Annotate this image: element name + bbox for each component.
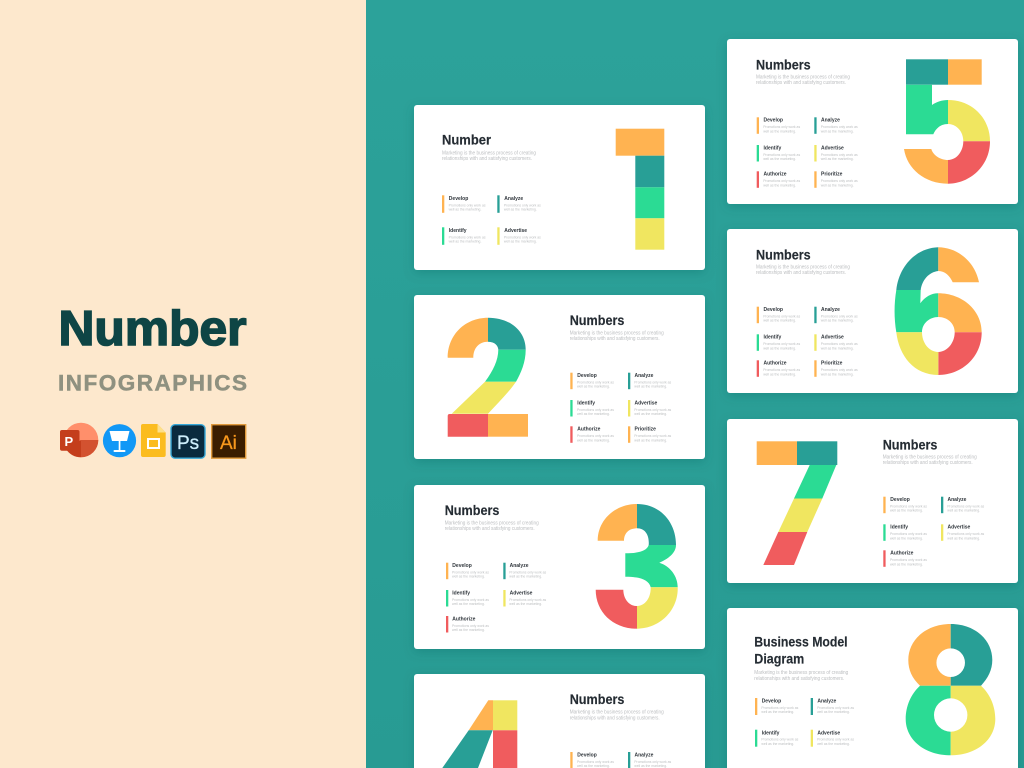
item: Advertise: Promotions only work as bbox=[821, 153, 858, 157]
panel: left cover bbox=[0, 0, 366, 768]
item: Develop: Develop bbox=[577, 373, 597, 379]
item: Analyze: well as the marketing. bbox=[509, 575, 542, 579]
panel: number 6 bbox=[727, 229, 1018, 393]
title: Numbers bbox=[883, 437, 937, 452]
item: Develop: Promotions only work as bbox=[577, 381, 614, 385]
item: Prioritize: well as the marketing. bbox=[821, 372, 854, 376]
icon: Photoshop bbox=[171, 425, 205, 458]
title bbox=[754, 635, 848, 666]
item: Advertise: Promotions only work as bbox=[634, 408, 672, 412]
panel: number 4 bbox=[414, 674, 705, 768]
panel: number 7 bbox=[727, 419, 1018, 583]
item: Prioritize: Prioritize bbox=[634, 427, 656, 433]
description bbox=[756, 74, 850, 86]
item: Authorize: Authorize bbox=[764, 361, 787, 367]
icon: PowerPoint: P bbox=[64, 434, 74, 449]
item: Analyze: Promotions only work as bbox=[634, 760, 672, 764]
item: Identify: Promotions only work as bbox=[763, 342, 800, 346]
item: Advertise: Promotions only work as bbox=[947, 532, 985, 536]
description: relationships with and satisfying customers. bbox=[883, 460, 973, 466]
item: Prioritize: Prioritize bbox=[821, 361, 843, 367]
item: Analyze: Analyze bbox=[821, 307, 840, 313]
item: Analyze: Analyze bbox=[821, 118, 840, 124]
item: Identify bbox=[446, 590, 489, 606]
item: Prioritize: well as the marketing. bbox=[634, 438, 667, 442]
item: Advertise: Promotions only work as bbox=[821, 342, 858, 346]
item: Advertise: Advertise bbox=[817, 730, 840, 736]
description: Marketing is the business process of creating bbox=[445, 520, 539, 526]
digit 6 bbox=[895, 247, 982, 375]
title: Numbers bbox=[445, 503, 499, 518]
item: Analyze bbox=[628, 752, 672, 768]
description: relationships with and satisfying customers. bbox=[756, 270, 846, 276]
item: Authorize: Authorize bbox=[577, 427, 601, 433]
digit 8 bbox=[906, 624, 995, 755]
item: Analyze: well as the marketing. bbox=[634, 764, 667, 768]
item: Develop: well as the marketing. bbox=[763, 129, 796, 133]
item: Develop: Promotions only work as bbox=[449, 204, 486, 208]
item: Develop: Develop bbox=[762, 699, 781, 705]
item: Identify: Promotions only work as bbox=[452, 598, 489, 602]
item: Identify: Promotions only work as bbox=[449, 236, 486, 240]
item: Develop bbox=[883, 497, 927, 513]
teal background bbox=[366, 0, 1024, 768]
item: Advertise: Promotions only work as bbox=[817, 738, 854, 742]
item: Identify: Identify bbox=[764, 145, 781, 151]
item: Prioritize: Promotions only work as bbox=[821, 368, 858, 372]
item: Identify: Identify bbox=[449, 228, 467, 234]
description: Marketing is the business process of creating bbox=[883, 454, 977, 460]
item: Authorize: well as the marketing. bbox=[763, 183, 796, 187]
item: Develop: well as the marketing. bbox=[577, 764, 610, 768]
item: Develop: Promotions only work as bbox=[452, 571, 489, 575]
item: Develop: Develop bbox=[890, 497, 910, 503]
item: Develop: Develop bbox=[449, 196, 468, 202]
description bbox=[442, 150, 536, 162]
item: Advertise: well as the marketing. bbox=[947, 536, 980, 540]
item: Develop: Promotions only work as bbox=[890, 505, 927, 509]
item: Develop: Develop bbox=[764, 307, 783, 313]
item: Analyze: well as the marketing. bbox=[821, 129, 854, 133]
item: Develop: well as the marketing. bbox=[763, 319, 796, 323]
item: Advertise: Advertise bbox=[821, 335, 844, 341]
item: Identify bbox=[442, 227, 486, 245]
item: Identify: well as the marketing. bbox=[761, 742, 794, 746]
panel: number 5 bbox=[727, 39, 1018, 204]
panel: number 3 bbox=[414, 485, 705, 649]
item: Authorize: Promotions only work as bbox=[890, 558, 927, 562]
item: Analyze: well as the marketing. bbox=[821, 319, 854, 323]
item: Develop: Develop bbox=[452, 563, 472, 569]
item: Identify bbox=[755, 730, 799, 747]
item: Authorize bbox=[446, 616, 489, 632]
digit 4 bbox=[442, 700, 517, 768]
item: Analyze bbox=[497, 195, 541, 213]
item: Identify: well as the marketing. bbox=[449, 240, 481, 244]
title: Diagram bbox=[754, 651, 804, 666]
description bbox=[445, 520, 539, 532]
item: Identify: Promotions only work as bbox=[761, 738, 799, 742]
digit 5 bbox=[904, 59, 990, 184]
item: Authorize: Authorize bbox=[452, 616, 476, 622]
item: Develop bbox=[757, 307, 800, 323]
item: Advertise: well as the marketing. bbox=[509, 602, 542, 606]
title: Numbers bbox=[570, 313, 624, 328]
item: Advertise: Advertise bbox=[948, 525, 971, 531]
item: Authorize: Authorize bbox=[764, 172, 787, 178]
item: Authorize: well as the marketing. bbox=[763, 372, 796, 376]
item: Prioritize bbox=[814, 171, 858, 188]
item: Identify: well as the marketing. bbox=[763, 157, 796, 161]
item: Authorize bbox=[757, 360, 800, 377]
item: Develop bbox=[442, 195, 486, 213]
item: Analyze: well as the marketing. bbox=[634, 385, 667, 389]
item: Analyze bbox=[814, 117, 858, 134]
description: relationships with and satisfying customers. bbox=[445, 526, 535, 532]
item: Advertise: Promotions only work as bbox=[504, 236, 541, 240]
item: Develop bbox=[570, 752, 614, 768]
item: Advertise: Advertise bbox=[634, 400, 658, 406]
item: Prioritize: Promotions only work as bbox=[634, 434, 672, 438]
item: Authorize: well as the marketing. bbox=[452, 628, 485, 632]
item: Develop bbox=[570, 373, 614, 389]
description: Marketing is the business process of creating bbox=[754, 670, 848, 676]
item: Authorize: Promotions only work as bbox=[763, 368, 800, 372]
item: Identify bbox=[883, 524, 927, 541]
description: relationships with and satisfying customers. bbox=[442, 156, 532, 162]
item: Develop: well as the marketing. bbox=[449, 208, 481, 212]
item: Analyze: Promotions only work as bbox=[509, 571, 547, 575]
item: Identify: well as the marketing. bbox=[452, 602, 485, 606]
heading: Number: Number bbox=[58, 301, 246, 356]
item: Analyze: Promotions only work as bbox=[634, 381, 672, 385]
item: Analyze bbox=[814, 307, 858, 323]
item: Prioritize bbox=[628, 426, 672, 443]
item: Identify: Promotions only work as bbox=[890, 532, 927, 536]
item: Develop: Promotions only work as bbox=[761, 706, 799, 710]
icon: Google Slides bbox=[141, 424, 166, 457]
item: Analyze: Promotions only work as bbox=[504, 204, 541, 208]
title: Business Model bbox=[754, 635, 848, 650]
item: Advertise bbox=[941, 524, 985, 541]
item: Identify: Identify bbox=[762, 730, 780, 736]
icon: Illustrator: Ai bbox=[220, 433, 237, 454]
item: Analyze bbox=[811, 698, 854, 715]
item: Prioritize: well as the marketing. bbox=[821, 183, 854, 187]
description: relationships with and satisfying customers. bbox=[754, 676, 844, 682]
item: Prioritize: Promotions only work as bbox=[821, 179, 858, 183]
item: Analyze: Promotions only work as bbox=[817, 706, 854, 710]
item: Analyze: well as the marketing. bbox=[947, 509, 980, 513]
item: Analyze: Analyze bbox=[510, 563, 529, 569]
item: Advertise: well as the marketing. bbox=[634, 412, 667, 416]
item: Advertise: Promotions only work as bbox=[509, 598, 547, 602]
item: Advertise: Advertise bbox=[504, 228, 527, 234]
item: Authorize bbox=[883, 550, 927, 567]
item: Identify: Promotions only work as bbox=[763, 153, 800, 157]
item: Analyze bbox=[503, 563, 547, 579]
description bbox=[754, 670, 848, 682]
item: Analyze: Analyze bbox=[504, 196, 523, 202]
item: Identify: Identify bbox=[452, 590, 470, 596]
item: Develop: Develop bbox=[764, 118, 783, 124]
item: Identify: well as the marketing. bbox=[890, 536, 923, 540]
item: Advertise: well as the marketing. bbox=[817, 742, 850, 746]
item: Develop: Develop bbox=[577, 752, 597, 758]
description: Marketing is the business process of creating bbox=[570, 330, 664, 336]
item: Analyze: well as the marketing. bbox=[817, 710, 850, 714]
item: Analyze: Analyze bbox=[948, 497, 967, 503]
item: Develop: well as the marketing. bbox=[577, 385, 610, 389]
item: Advertise: well as the marketing. bbox=[821, 346, 854, 350]
description: Marketing is the business process of creating bbox=[442, 150, 536, 156]
item: Identify: Identify bbox=[890, 525, 908, 531]
item: Analyze: Analyze bbox=[634, 752, 654, 758]
item: Analyze: Promotions only work as bbox=[821, 315, 858, 319]
item: Identify bbox=[757, 334, 800, 351]
digit 3 bbox=[596, 504, 678, 629]
item: Advertise bbox=[814, 334, 858, 351]
item: Prioritize bbox=[814, 360, 858, 377]
digit 1 bbox=[616, 129, 664, 250]
item: Authorize: well as the marketing. bbox=[890, 562, 923, 566]
icon: Keynote bbox=[103, 424, 136, 457]
panel: number 8 bbox=[727, 608, 1018, 768]
digit 2 bbox=[448, 318, 528, 437]
item: Authorize: well as the marketing. bbox=[577, 438, 610, 442]
item: Authorize bbox=[570, 426, 614, 443]
item: Identify: Identify bbox=[577, 400, 595, 406]
description bbox=[570, 710, 664, 721]
item: Analyze: Promotions only work as bbox=[821, 125, 858, 129]
item: Analyze: Analyze bbox=[634, 373, 654, 379]
item: Authorize: Promotions only work as bbox=[577, 434, 614, 438]
title: Number bbox=[442, 133, 492, 148]
item: Advertise: well as the marketing. bbox=[504, 240, 537, 244]
item: Advertise bbox=[497, 227, 541, 245]
item: Develop: well as the marketing. bbox=[452, 575, 485, 579]
item: Advertise bbox=[503, 590, 547, 606]
item: Analyze: well as the marketing. bbox=[504, 208, 537, 212]
item: Develop bbox=[446, 563, 489, 579]
item: Identify bbox=[757, 145, 800, 162]
item: Analyze bbox=[941, 497, 985, 513]
item: Develop bbox=[757, 117, 800, 134]
item: Identify bbox=[570, 400, 614, 416]
item: Develop: well as the marketing. bbox=[761, 710, 794, 714]
item: Prioritize: Prioritize bbox=[821, 172, 843, 178]
panel: number 2 bbox=[414, 295, 705, 459]
item: Analyze: Promotions only work as bbox=[947, 505, 985, 509]
item: Authorize: Promotions only work as bbox=[452, 624, 489, 628]
description: relationships with and satisfying customers. bbox=[570, 715, 660, 721]
item: Develop bbox=[755, 698, 799, 715]
item: Identify: well as the marketing. bbox=[577, 412, 610, 416]
item: Advertise: Advertise bbox=[821, 145, 844, 151]
item: Authorize bbox=[757, 171, 800, 188]
description bbox=[883, 454, 977, 466]
title: Numbers bbox=[570, 692, 624, 707]
item: Advertise: well as the marketing. bbox=[821, 157, 854, 161]
item: Develop: well as the marketing. bbox=[890, 509, 923, 513]
description: Marketing is the business process of creating bbox=[756, 264, 850, 270]
item: Identify: Promotions only work as bbox=[577, 408, 614, 412]
title: Numbers bbox=[756, 247, 811, 262]
item: Analyze: Analyze bbox=[817, 699, 837, 705]
item: Develop: Promotions only work as bbox=[577, 760, 614, 764]
item: Develop: Promotions only work as bbox=[763, 315, 800, 319]
item: Advertise bbox=[811, 730, 854, 747]
item: Analyze bbox=[628, 373, 672, 389]
description: relationships with and satisfying customers. bbox=[756, 80, 846, 86]
icon: Illustrator bbox=[212, 425, 246, 458]
icon: PowerPoint bbox=[60, 423, 98, 457]
item: Identify: well as the marketing. bbox=[763, 346, 796, 350]
icon: Photoshop: Ps bbox=[177, 433, 199, 454]
item: Identify: Identify bbox=[764, 335, 781, 341]
item: Advertise bbox=[628, 400, 672, 416]
item: Authorize: Authorize bbox=[890, 551, 914, 557]
item: Advertise: Advertise bbox=[510, 590, 533, 596]
digit 7 bbox=[757, 441, 837, 565]
description: relationships with and satisfying customers. bbox=[570, 336, 660, 342]
item: Authorize: Promotions only work as bbox=[763, 179, 800, 183]
subheading: Infographics: INFOGRAPHICS bbox=[58, 371, 247, 396]
description bbox=[756, 264, 850, 276]
item: Advertise bbox=[814, 145, 858, 162]
panel: number 1 bbox=[414, 105, 705, 270]
description bbox=[570, 330, 664, 342]
description: Marketing is the business process of creating bbox=[570, 710, 664, 716]
description: Marketing is the business process of creating bbox=[756, 74, 850, 80]
item: Develop: Promotions only work as bbox=[763, 125, 800, 129]
title: Numbers bbox=[756, 57, 811, 72]
